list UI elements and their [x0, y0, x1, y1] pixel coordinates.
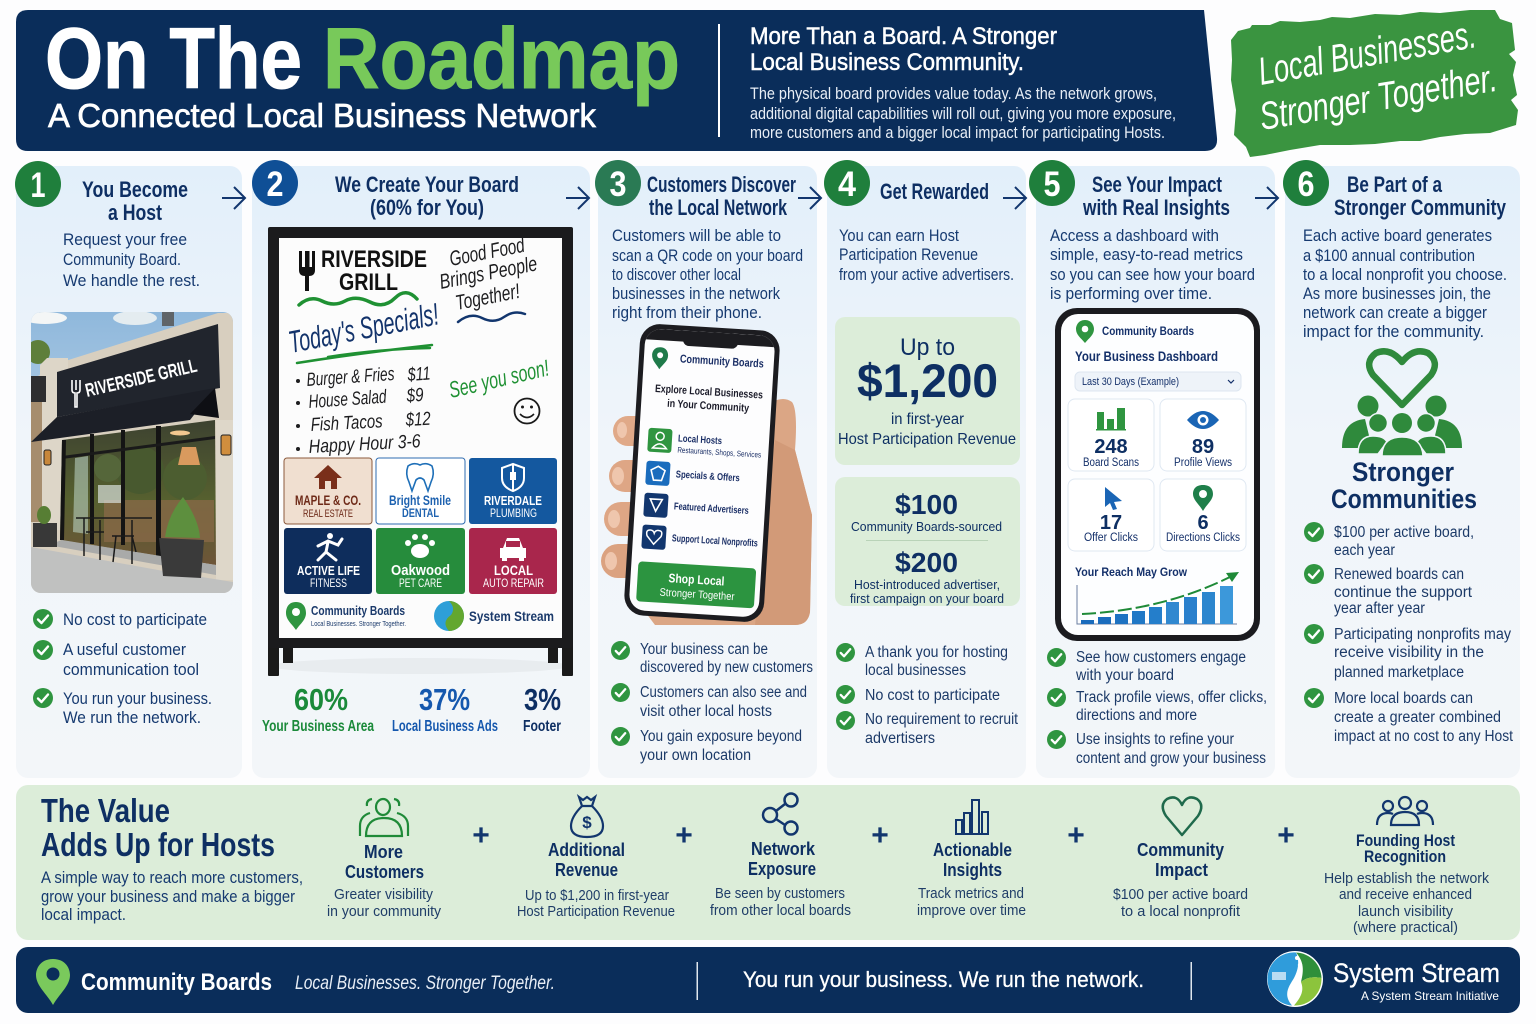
- value heading: [41, 792, 275, 863]
- bullet: You gain exposure beyond: [640, 728, 802, 745]
- bullet: A thank you for hosting: [865, 644, 1008, 661]
- ad tile: Bright Smile: [376, 458, 465, 524]
- ad tile: Maple: REAL ESTATE: [303, 508, 353, 520]
- ad tile: Active Life: FITNESS: [310, 576, 347, 590]
- phone: dashboard: [1055, 308, 1260, 641]
- callout: revenue: $1,200: [857, 354, 998, 407]
- metric: profile views: [1160, 399, 1246, 471]
- step 6 heading: Be Part of a: [1347, 172, 1443, 197]
- step 1 text: Request your free: [63, 231, 187, 249]
- value text: grow your business and make a bigger: [41, 888, 295, 906]
- plus: +: [871, 819, 889, 852]
- header banner: [16, 10, 1217, 151]
- step 6 heading: [1334, 172, 1507, 220]
- bullet: [1304, 564, 1473, 617]
- plus: +: [1277, 819, 1295, 852]
- plus: +: [472, 819, 490, 852]
- value item: additional revenue: [517, 797, 675, 920]
- value item: network exposure: from other local boards: [710, 903, 851, 919]
- app row: specials: [645, 460, 740, 486]
- restaurant logo: [299, 246, 427, 305]
- bullet: local businesses: [865, 662, 966, 679]
- restaurant logo: GRILL: [339, 269, 398, 296]
- board footer logos: Community Boards: [311, 603, 405, 618]
- sign text: [72, 356, 199, 407]
- metric: profile views: Profile Views: [1174, 457, 1232, 469]
- step number 5: [1029, 160, 1075, 206]
- value text: A simple way to reach more customers,: [41, 869, 303, 887]
- stronger communities label: [1331, 457, 1477, 514]
- split stat: 3%: 3%: [524, 682, 561, 717]
- plus: +: [1067, 819, 1085, 852]
- menu list: House Salad: [308, 387, 388, 413]
- title highlight: Roadmap: [323, 11, 680, 107]
- step 3 text: Customers will be able to: [612, 227, 781, 245]
- bullet: each year: [1334, 542, 1395, 559]
- bullets: [1304, 522, 1514, 745]
- icon: bar chart: [955, 800, 989, 834]
- bullet: We run the network.: [63, 709, 201, 727]
- split stat: 37%: Local Business Ads: [392, 718, 498, 735]
- step 2 heading: We Create Your Board: [335, 172, 519, 197]
- value text: local impact.: [41, 906, 126, 924]
- app row: nonprofits: Support Local Nonprofits: [672, 533, 758, 550]
- step 2 heading: (60% for You): [370, 195, 484, 220]
- ad tile: Bright Smile: Bright Smile: [389, 493, 451, 508]
- handwritten slogan: Good Food: [448, 234, 527, 271]
- step 6 text: impact for the community.: [1303, 323, 1484, 341]
- ad tile: Active Life: ACTIVE LIFE: [297, 563, 360, 578]
- value item: more customers: Greater visibility: [334, 887, 434, 903]
- bullets: [33, 609, 212, 727]
- bullet: discovered by new customers: [640, 659, 813, 676]
- step 1 heading: a Host: [108, 200, 163, 225]
- value item: founding host recognition: Recognition: [1364, 848, 1446, 866]
- value item: community impact: Impact: [1155, 859, 1208, 880]
- icon: money bag: $: [582, 813, 592, 832]
- subtitle: A Connected Local Business Network: [48, 97, 596, 134]
- header message: more customers and a bigger local impact for participating Hosts.: [750, 124, 1165, 142]
- icon: map pin: [36, 959, 70, 1005]
- metric: directions clicks: 6: [1197, 512, 1209, 534]
- step 6 text: a $100 annual contribution: [1303, 247, 1475, 265]
- bullet: More local boards can: [1334, 690, 1473, 707]
- menu list: Burger & Fries: [306, 364, 395, 391]
- step number 3: 3: [610, 165, 626, 204]
- menu list: $9: [405, 385, 425, 407]
- value item: actionable insights: [917, 800, 1026, 919]
- callout: bonus amounts: $100: [895, 489, 958, 520]
- step 3 heading: [647, 172, 796, 220]
- bullet: visit other local hosts: [640, 703, 772, 720]
- value item: founding host recognition: Founding Host: [1356, 832, 1455, 850]
- icon: heart and people: [1342, 351, 1462, 456]
- split stat: 37%: [392, 682, 498, 735]
- title: On The: [45, 11, 302, 107]
- bullet: $100 per active board,: [1334, 524, 1474, 541]
- callout: bonus amounts: $200: [895, 547, 958, 578]
- step number 4: 4: [838, 165, 856, 204]
- logo wordmark: [1333, 958, 1500, 1003]
- footer message: You run your business. We run the network.: [743, 967, 1144, 992]
- icon: heart: [1163, 797, 1201, 835]
- step 5 heading: with Real Insights: [1082, 195, 1230, 220]
- app row: hosts: Local Hosts: [678, 433, 723, 447]
- bullet: content and grow your business: [1076, 750, 1266, 767]
- step 6 text: As more businesses join, the: [1303, 285, 1491, 303]
- step number 5: 5: [1044, 165, 1060, 204]
- logo: System Stream: [1267, 951, 1323, 1007]
- icon: network: [763, 794, 798, 834]
- step 3 text: [612, 227, 803, 322]
- step 6 text: [1303, 227, 1507, 341]
- bullet: planned marketplace: [1334, 664, 1464, 681]
- step 5 text: [1050, 227, 1255, 303]
- bullet: year after year: [1334, 600, 1425, 617]
- see you soon: [446, 354, 552, 424]
- app button: Shop Local: [668, 571, 725, 589]
- step 5 heading: [1082, 172, 1230, 220]
- value item: additional revenue: Host Participation Revenue: [517, 904, 675, 920]
- header message: The physical board provides value today. As the network grows,: [750, 85, 1157, 103]
- footer brand: Community Boards: [81, 969, 272, 996]
- step 6 text: Each active board generates: [1303, 227, 1492, 245]
- bullet: continue the support: [1334, 584, 1473, 601]
- step 5 text: so you can see how your board: [1050, 266, 1255, 284]
- bullets: [1047, 648, 1267, 767]
- stronger communities label: Communities: [1331, 484, 1477, 514]
- callout: bonus amounts: Community Boards-sourced: [851, 520, 1002, 534]
- app row: advertisers: Featured Advertisers: [674, 501, 749, 517]
- step number 2: [252, 160, 298, 206]
- step 3 text: right from their phone.: [612, 304, 762, 322]
- sign text: RIVERSIDE GRILL: [83, 356, 199, 402]
- header message: additional digital capabilities will roll out, giving you more exposure,: [750, 105, 1176, 123]
- step number 1: [15, 161, 61, 207]
- panel: value for hosts: [16, 785, 1520, 940]
- icon: money bag: [571, 797, 603, 837]
- metric: offer clicks: [1068, 479, 1154, 551]
- bullet: [611, 727, 802, 764]
- ad tile: Riverdale: [469, 458, 557, 524]
- step 2 heading: [335, 172, 519, 220]
- handwritten slogan: Brings People: [438, 252, 539, 294]
- menu list: Fish Tacos: [310, 411, 384, 436]
- icon: group: [1377, 797, 1433, 825]
- value item: additional revenue: Additional: [548, 839, 625, 860]
- step 3 text: businesses in the network: [612, 285, 781, 303]
- bullets: [836, 643, 1019, 747]
- panel: step 4: [824, 160, 1026, 778]
- bullet: A useful customer: [63, 641, 186, 659]
- app title: Explore Local Businesses: [655, 383, 763, 402]
- bullet: [33, 640, 199, 679]
- date dropdown: Last 30 Days (Example): [1082, 376, 1179, 388]
- bullet: [33, 688, 212, 727]
- arrow: [1003, 187, 1026, 209]
- ad tile: Oakwood: PET CARE: [399, 576, 442, 590]
- arrow: [566, 187, 589, 209]
- see you soon: See you soon!: [446, 354, 552, 403]
- arrow: [1255, 187, 1278, 209]
- value item: network exposure: Network: [751, 838, 816, 859]
- dashboard header: Community Boards: [1102, 324, 1194, 338]
- callout: bonus amounts: Host-introduced advertiser,: [854, 578, 1000, 592]
- bullet: See how customers engage: [1076, 649, 1246, 666]
- phone with app: [623, 323, 781, 623]
- step 4 text: [839, 227, 1014, 284]
- app row: nonprofits: [641, 524, 758, 550]
- ad tile: Maple: [284, 458, 372, 524]
- step 1 text: Community Board.: [63, 251, 181, 269]
- value item: more customers: in your community: [327, 904, 442, 920]
- metric: board scans: 248: [1094, 436, 1128, 458]
- split stat: 37%: 37%: [419, 682, 470, 717]
- value text: [41, 869, 303, 924]
- value heading: The Value: [41, 792, 170, 829]
- specials heading: [286, 296, 442, 363]
- board footer logos: Local Businesses. Stronger Together.: [311, 621, 406, 628]
- bullet: [836, 711, 1019, 747]
- app row: hosts: Restaurants, Shops, Services: [677, 445, 761, 460]
- bullet: create a greater combined: [1334, 709, 1501, 726]
- logo wordmark: System Stream: [1333, 958, 1500, 988]
- date dropdown: [1075, 372, 1241, 391]
- ad tile: Oakwood: Oakwood: [391, 563, 450, 579]
- value item: community impact: $100 per active board: [1113, 887, 1248, 903]
- value item: actionable insights: Insights: [943, 859, 1002, 880]
- growth chart: Your Reach May Grow: [1075, 565, 1188, 579]
- step 4 text: Participation Revenue: [839, 246, 978, 264]
- plus: +: [675, 819, 693, 852]
- menu list: [296, 363, 432, 458]
- value item: more customers: Customers: [345, 861, 424, 882]
- value heading: Adds Up for Hosts: [41, 826, 275, 863]
- step 3 text: to discover other local: [612, 266, 741, 284]
- split stat: 3%: [523, 682, 561, 735]
- callout: bonus amounts: first campaign on your board: [850, 592, 1004, 606]
- bullet: No requirement to recruit: [865, 711, 1019, 728]
- value item: additional revenue: Up to $1,200 in first-year: [525, 888, 669, 904]
- callout: bonus amounts: [835, 477, 1020, 606]
- ad tile: Oakwood: [376, 528, 465, 594]
- bullet: Your business can be: [640, 641, 768, 658]
- split stat: 3%: Footer: [523, 718, 561, 735]
- step number 2: 2: [266, 165, 284, 204]
- growth chart: [1075, 565, 1239, 624]
- step 5 heading: See Your Impact: [1092, 172, 1223, 197]
- step 5 text: simple, easy-to-read metrics: [1050, 246, 1243, 264]
- step number 3: [595, 160, 641, 206]
- callout: revenue: Up to: [900, 334, 955, 361]
- value item: founding host recognition: Help establish the network: [1324, 871, 1490, 887]
- bullet: Renewed boards can: [1334, 566, 1464, 583]
- header message: More Than a Board. A Stronger: [750, 23, 1057, 50]
- step 6 text: to a local nonprofit you choose.: [1303, 266, 1507, 284]
- handwritten slogan: Together!: [454, 280, 522, 315]
- bullet: communication tool: [63, 661, 199, 679]
- bullet: Participating nonprofits may: [1334, 626, 1511, 643]
- bullet: Use insights to refine your: [1076, 731, 1234, 748]
- value item: more customers: More: [364, 841, 403, 862]
- ad tile: Riverdale: RIVERDALE: [484, 493, 542, 508]
- ad tile: Riverdale: PLUMBING: [490, 506, 537, 520]
- bullet: No cost to participate: [865, 687, 1000, 704]
- step 3 heading: Customers Discover: [647, 172, 796, 197]
- metric: profile views: 89: [1192, 436, 1214, 458]
- bullet: [1047, 688, 1267, 724]
- split stat: 60%: 60%: [294, 682, 348, 717]
- bullet: directions and more: [1076, 707, 1197, 724]
- app row: specials: Specials & Offers: [675, 469, 740, 484]
- value item: actionable insights: Track metrics and: [918, 886, 1024, 902]
- bullet: Customers can also see and: [640, 684, 807, 701]
- step number 6: 6: [1298, 165, 1314, 204]
- value item: network exposure: [710, 794, 851, 919]
- stronger communities label: Stronger: [1352, 457, 1454, 487]
- ad tile: Maple: MAPLE & CO.: [295, 493, 361, 508]
- value item: more customers: [327, 799, 442, 920]
- bullet: Track profile views, offer clicks,: [1076, 689, 1267, 706]
- app row: hosts: [647, 428, 762, 460]
- app button: Stronger Together: [659, 587, 735, 603]
- photo: storefront: [23, 311, 233, 593]
- step 5 text: is performing over time.: [1050, 285, 1212, 303]
- app button: [636, 561, 756, 608]
- value item: founding host recognition: and receive enhanced: [1339, 887, 1472, 903]
- metric: directions clicks: [1160, 479, 1246, 551]
- callout: revenue: Host Participation Revenue: [838, 431, 1016, 448]
- step 1 text: We handle the rest.: [63, 272, 200, 290]
- bullet: [611, 683, 807, 720]
- bullet: [836, 643, 1008, 679]
- step 3 text: scan a QR code on your board: [612, 247, 803, 265]
- bullet: [836, 685, 1000, 704]
- value item: additional revenue: Revenue: [555, 859, 618, 880]
- menu list: $11: [406, 363, 431, 386]
- bullet: [1047, 730, 1266, 767]
- bullet: receive visibility in the: [1334, 644, 1484, 661]
- arrow: [222, 187, 245, 209]
- app header: [652, 347, 764, 370]
- step 3 heading: the Local Network: [649, 195, 788, 220]
- bullet: [1304, 688, 1514, 745]
- header message: [750, 23, 1176, 142]
- bullet: [1304, 624, 1511, 681]
- bullet: [1047, 648, 1246, 684]
- arrow: [798, 187, 821, 209]
- app title: in Your Community: [667, 398, 750, 415]
- metric: directions clicks: Directions Clicks: [1166, 532, 1240, 544]
- community board illustration: [268, 227, 573, 676]
- step number 4: [824, 160, 870, 206]
- panel: step 3: [595, 160, 821, 778]
- step 4 heading: Get Rewarded: [880, 179, 989, 204]
- restaurant logo: RIVERSIDE: [321, 246, 427, 273]
- callout: revenue: [835, 317, 1020, 465]
- step number 1: 1: [30, 166, 46, 205]
- ad tile: Active Life: [284, 528, 372, 594]
- header message: Local Business Community.: [750, 49, 1024, 76]
- ad tile: Bright Smile: DENTAL: [402, 506, 439, 520]
- bullet: impact at no cost to any Host: [1334, 728, 1514, 745]
- step 1 text: [63, 231, 200, 290]
- app row: advertisers: [643, 492, 748, 518]
- tagline brush: [1231, 10, 1518, 157]
- value item: founding host recognition: launch visibility: [1358, 904, 1454, 920]
- dashboard header: [1075, 320, 1218, 364]
- value item: founding host recognition: [1324, 797, 1490, 936]
- footer tagline: Local Businesses. Stronger Together.: [295, 973, 555, 994]
- metric: offer clicks: 17: [1100, 512, 1122, 534]
- panel: step 6: [1283, 160, 1520, 778]
- bullet: advertisers: [865, 730, 935, 747]
- ad tile: Local Auto: [469, 528, 557, 594]
- metric: board scans: [1068, 399, 1154, 471]
- logo wordmark: A System Stream Initiative: [1361, 989, 1499, 1003]
- dashboard header: Your Business Dashboard: [1075, 348, 1218, 364]
- panel: step 5: [1029, 160, 1278, 778]
- app header: Community Boards: [680, 353, 764, 371]
- panel: step 1: [15, 161, 245, 778]
- panel: step 2: [252, 160, 590, 778]
- value item: actionable insights: Actionable: [933, 839, 1012, 860]
- value item: founding host recognition: (where practical): [1353, 920, 1458, 936]
- split stat: 60%: [262, 682, 374, 735]
- value item: community impact: [1113, 797, 1248, 920]
- step 6 text: network can create a bigger: [1303, 304, 1487, 322]
- bullet: your own location: [640, 747, 751, 764]
- value item: community impact: to a local nonprofit: [1121, 904, 1240, 920]
- split stat: 60%: Your Business Area: [262, 718, 374, 735]
- bullet: No cost to participate: [63, 611, 207, 629]
- bullet: [1304, 522, 1474, 559]
- step 1 heading: [82, 177, 188, 225]
- step 1 heading: You Become: [82, 177, 188, 202]
- value item: actionable insights: improve over time: [917, 903, 1026, 919]
- step 5 text: Access a dashboard with: [1050, 227, 1219, 245]
- menu list: Happy Hour 3-6: [308, 431, 421, 458]
- step 4 text: You can earn Host: [839, 227, 959, 245]
- board footer logos: System Stream: [469, 608, 554, 624]
- callout: revenue: in first-year: [891, 411, 964, 428]
- hand holding phone: [601, 323, 812, 625]
- metric: offer clicks: Offer Clicks: [1084, 532, 1138, 544]
- specials heading: Today's Specials!: [286, 296, 442, 360]
- footer bar: [16, 947, 1520, 1013]
- app title: [655, 384, 762, 414]
- metric: board scans: Board Scans: [1083, 457, 1139, 469]
- tagline text: [1255, 13, 1500, 139]
- value item: network exposure: Exposure: [748, 858, 816, 879]
- handwritten slogan: [438, 234, 539, 322]
- value item: network exposure: Be seen by customers: [715, 886, 845, 902]
- step number 6: [1283, 160, 1329, 206]
- board footer logos: [286, 601, 554, 631]
- bullet: [611, 641, 813, 676]
- bullets: [611, 641, 813, 764]
- icon: customers: [360, 799, 408, 836]
- ad tile: Local Auto: LOCAL: [494, 562, 533, 578]
- ad tile: Local Auto: AUTO REPAIR: [483, 576, 544, 590]
- step 4 text: from your active advertisers.: [839, 266, 1014, 284]
- menu list: $12: [404, 409, 432, 431]
- bullet: with your board: [1075, 667, 1174, 684]
- value item: community impact: Community: [1137, 839, 1225, 860]
- bullet: You run your business.: [63, 690, 212, 708]
